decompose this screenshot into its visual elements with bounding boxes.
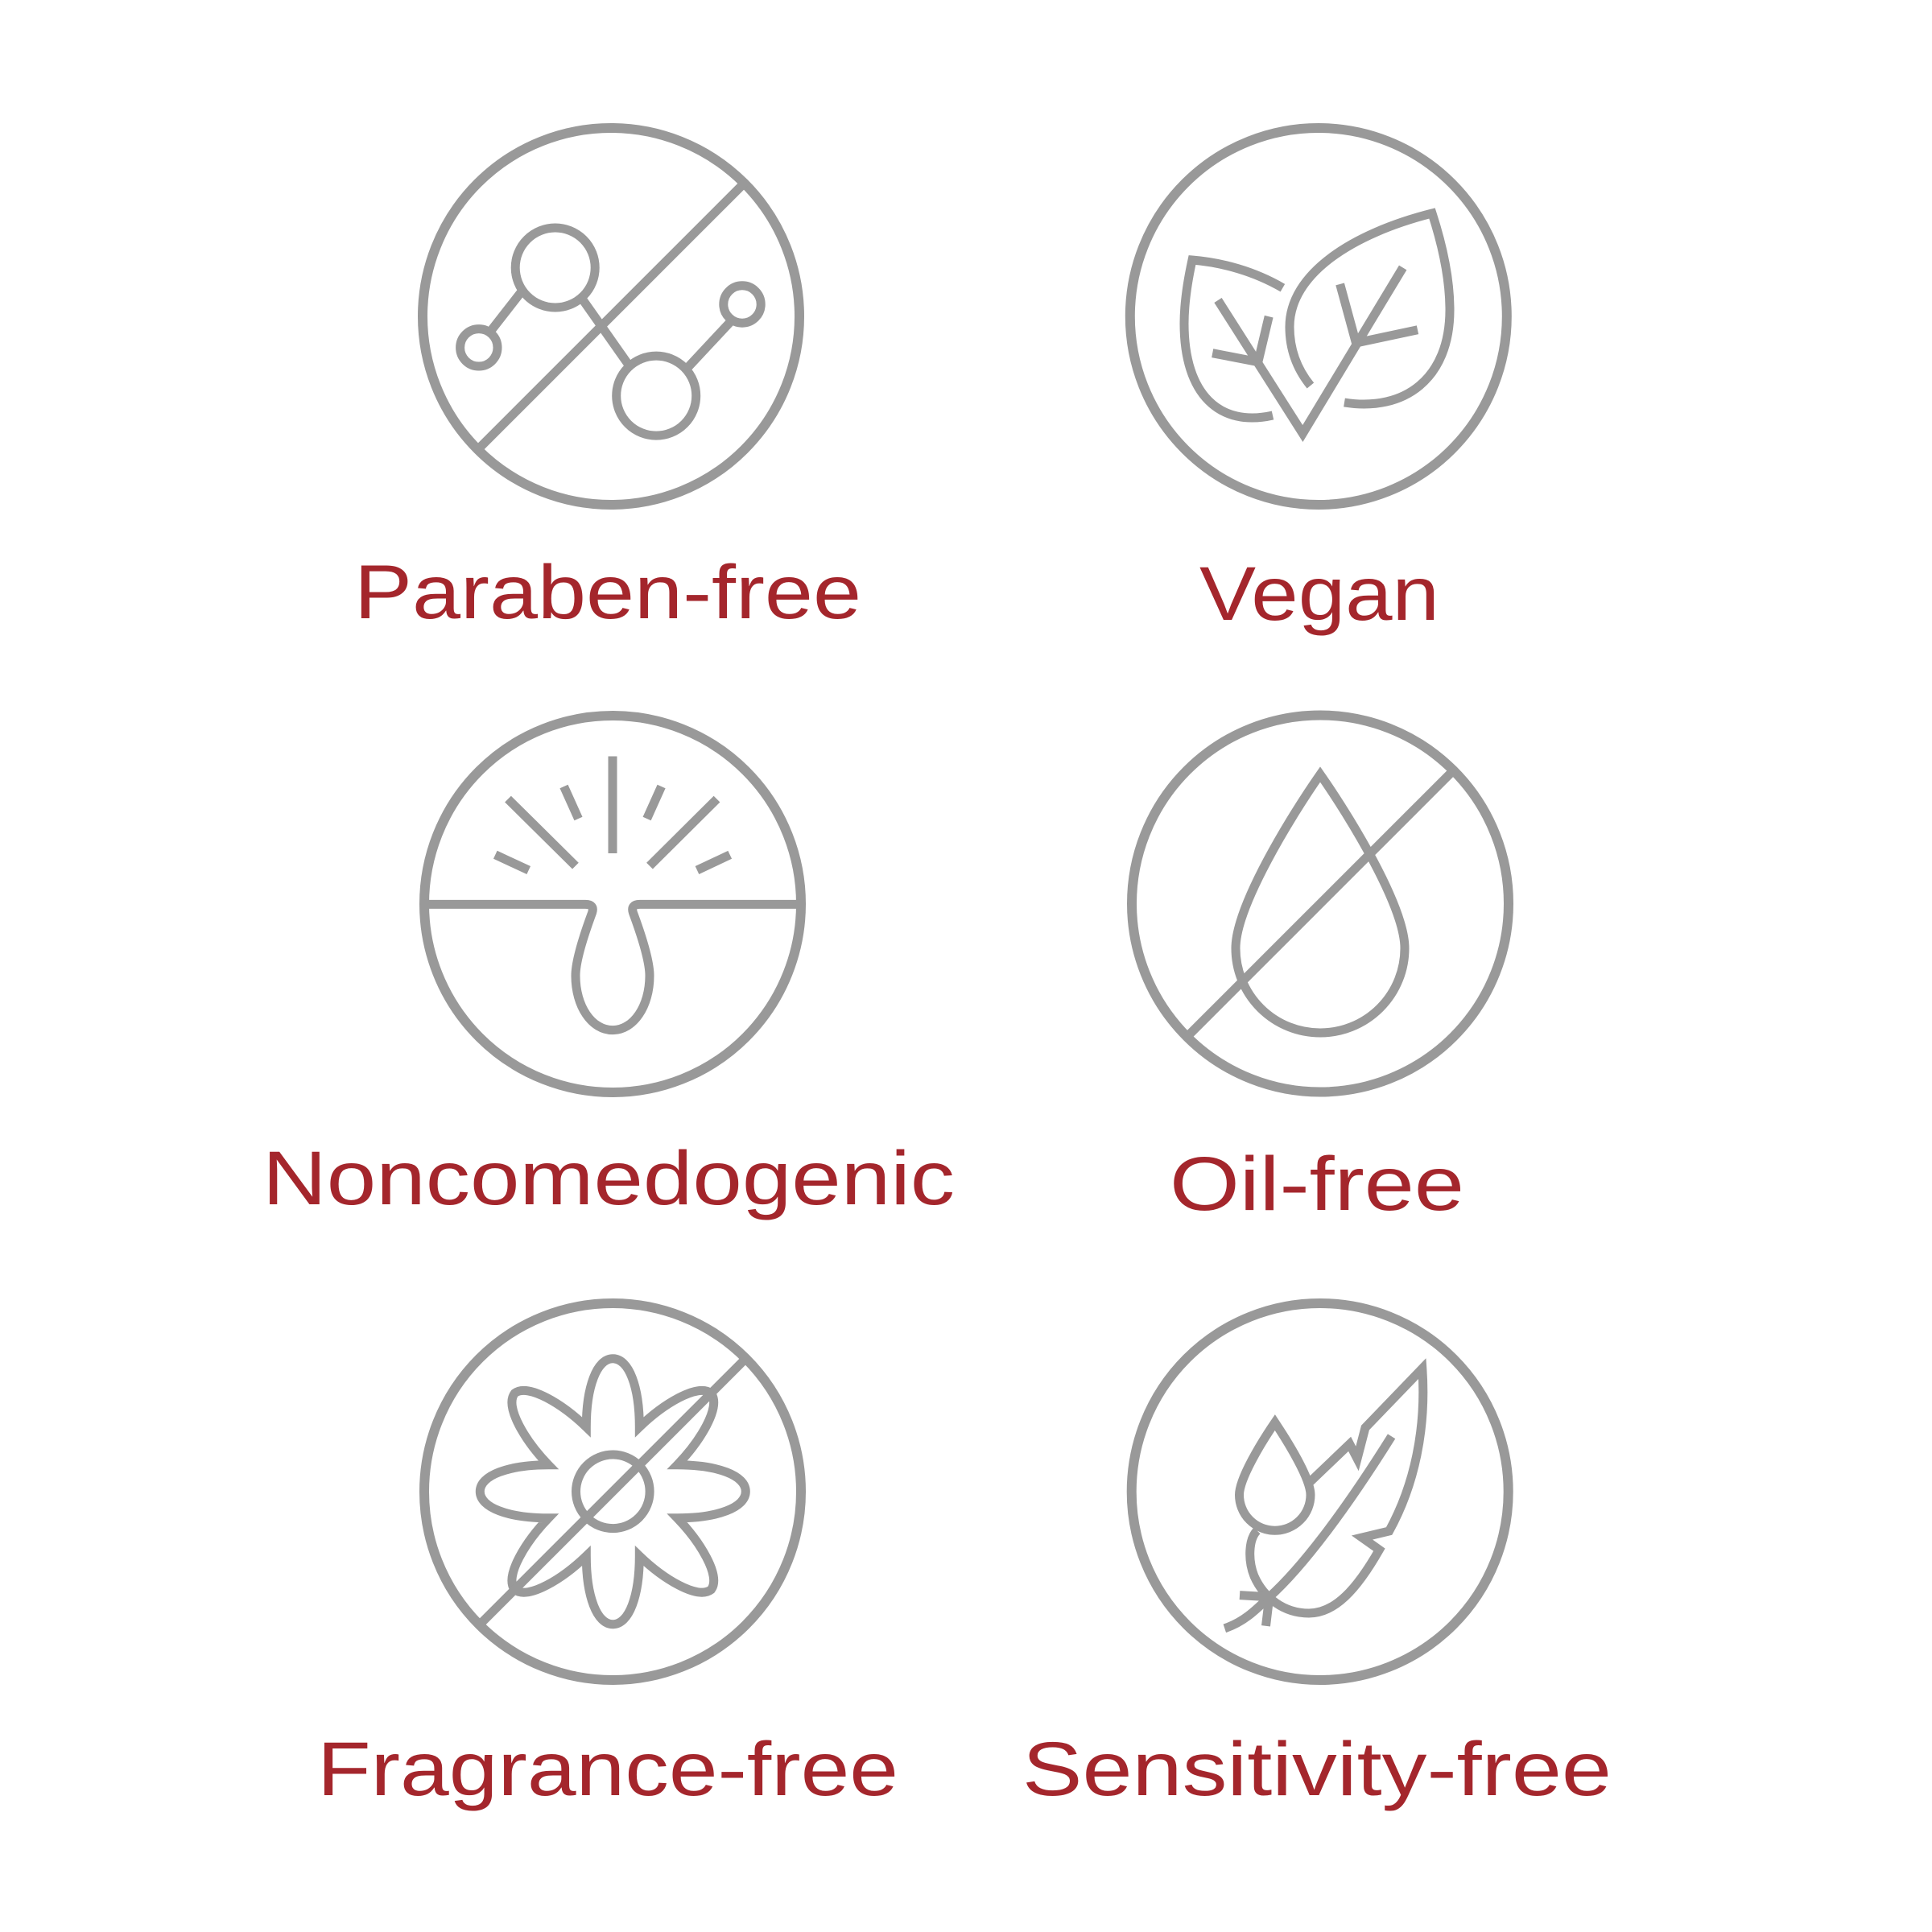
label: Vegan: Vegan — [1199, 551, 1439, 637]
label: Oil-free: Oil-free — [1170, 1141, 1464, 1227]
panel: Sensitivity-free — [1022, 1303, 1612, 1812]
icon: feather and drop — [1132, 1303, 1509, 1680]
panel: Vegan — [1130, 128, 1507, 637]
icon: crossed-out paraben molecule — [423, 128, 799, 505]
icon: two leaves — [1130, 128, 1507, 505]
icon: clear pore with rays — [424, 716, 801, 1092]
icon: crossed-out flower — [424, 1303, 801, 1680]
label: Fragrance-free: Fragrance-free — [317, 1727, 898, 1812]
label: Noncomedogenic: Noncomedogenic — [262, 1136, 955, 1221]
panel: Fragrance-free — [317, 1303, 898, 1812]
panel: Noncomedogenic — [262, 716, 955, 1221]
label: Paraben-free: Paraben-free — [354, 550, 861, 635]
panel: Oil-free — [1132, 715, 1509, 1227]
icon: crossed-out oil drop — [1132, 715, 1509, 1092]
panel: Paraben-free — [354, 128, 861, 635]
label: Sensitivity-free: Sensitivity-free — [1022, 1727, 1612, 1812]
